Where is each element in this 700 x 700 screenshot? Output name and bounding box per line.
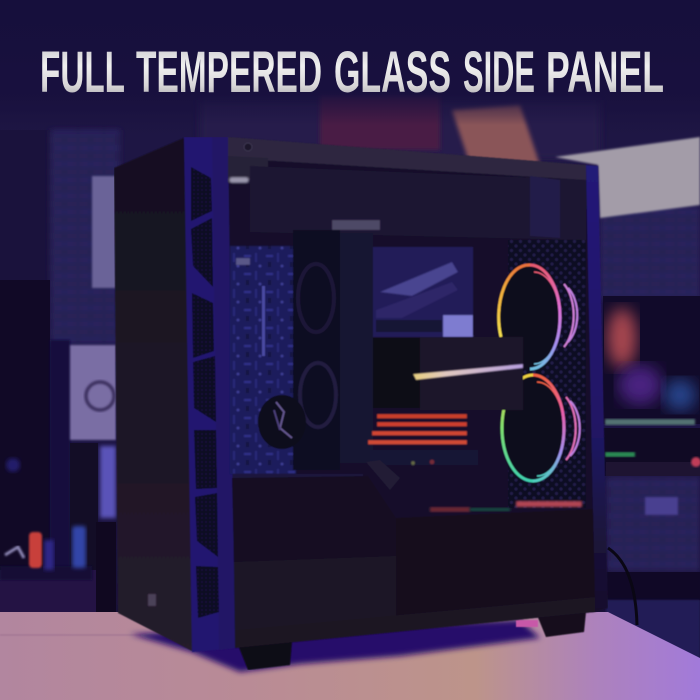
side logo: [148, 594, 156, 606]
GPU shroud area: [373, 245, 508, 337]
PCI bracket: [332, 220, 380, 230]
title: FULL: [40, 40, 125, 105]
top band of chassis: [228, 137, 586, 180]
pink underglow: [516, 620, 538, 627]
lower RGB fan: [502, 375, 580, 481]
power cable: [608, 548, 637, 625]
title: GLASS: [334, 40, 451, 105]
case shadow on table: [130, 620, 540, 672]
motherboard: [230, 246, 363, 478]
PSU shroud: [232, 476, 595, 630]
title: [40, 40, 664, 105]
case feet: [238, 612, 586, 670]
table top: [0, 612, 700, 700]
monitor, left: [0, 280, 70, 580]
cable sleeve bundle: [366, 460, 400, 490]
ROG pump block: [258, 395, 306, 449]
dark block beside graphics card: [373, 338, 421, 408]
upper RGB fan: [499, 265, 577, 369]
wall picture, left: [70, 345, 116, 440]
case bottom edge: [235, 597, 595, 648]
graphics card with light bar: [413, 337, 523, 410]
shelf items, left: [0, 443, 116, 612]
rear mesh panel: [508, 240, 586, 508]
monitor, right: [603, 296, 700, 515]
tempered glass panel: [228, 137, 595, 648]
RAM red light strips: [368, 414, 467, 444]
title: SIDE: [463, 40, 535, 105]
wall sign, right: [555, 137, 700, 218]
rear frame edge: [585, 165, 608, 612]
upper chamber: [250, 166, 586, 240]
top bracket with screw: [228, 143, 268, 183]
lower board glow: [370, 450, 478, 465]
PC case: [114, 137, 608, 670]
case side panel: [114, 137, 194, 652]
cooler radiator tower: [340, 233, 373, 463]
front panel with mesh vents: [184, 137, 236, 652]
title: TEMPERED: [136, 40, 322, 105]
poster, left: [92, 176, 116, 288]
CPU cooler fans: [293, 230, 340, 470]
